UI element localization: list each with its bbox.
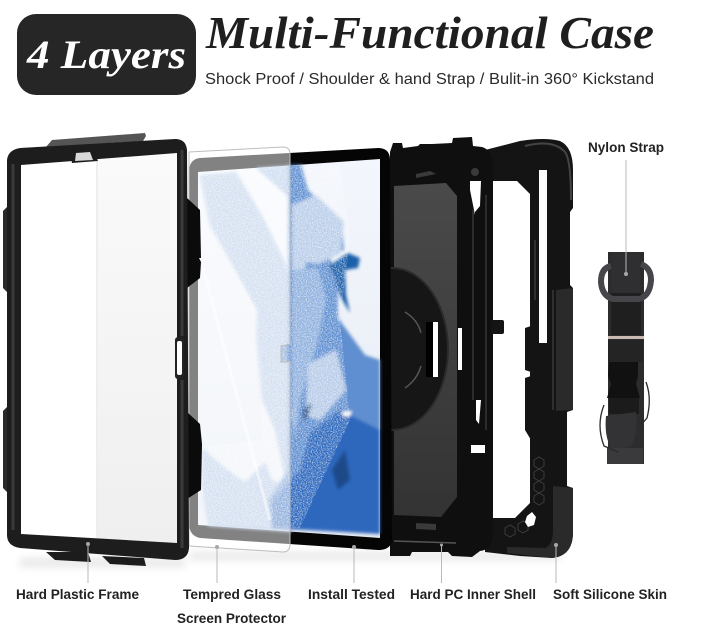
- layer: outer soft silicone skin: [485, 139, 573, 558]
- back panel: [394, 183, 457, 517]
- subtitle: Shock Proof / Shoulder & hand Strap / Bulit-in 360° Kickstand: [205, 71, 654, 88]
- label: screen protector: Screen Protector: [177, 611, 287, 626]
- label: nylon strap: Nylon Strap: [588, 140, 664, 155]
- ground shadow: [20, 552, 560, 567]
- label: soft silicone skin: Soft Silicone Skin: [553, 587, 667, 602]
- nylon strap: [600, 252, 651, 464]
- frame side bumps: [3, 207, 7, 492]
- frame slots: [470, 181, 485, 453]
- label: install tested: Install Tested: [308, 587, 395, 602]
- buckle: [607, 362, 640, 398]
- strap tab: [606, 412, 636, 449]
- badge: 4 Layers: [17, 14, 196, 95]
- label: tempered glass: Tempred Glass: [183, 587, 281, 602]
- layer: hard PC inner shell: [336, 137, 504, 557]
- frame bottom tabs: [46, 552, 146, 566]
- frame notch: [70, 147, 98, 163]
- title: Multi-Functional Case: [205, 7, 654, 58]
- layer: tablet with screen: [189, 148, 392, 550]
- screen artwork: [200, 165, 380, 534]
- leader lines: [86, 160, 628, 583]
- frame side tabs: [187, 198, 202, 499]
- layer: tempered glass screen protector: [189, 147, 290, 552]
- layer: hard plastic frame: [3, 133, 202, 566]
- artwork speckle: [200, 165, 350, 528]
- frame top tab: [46, 133, 146, 147]
- kickstand ring: [336, 268, 462, 430]
- strap ring: [608, 336, 644, 339]
- label: hard PC inner shell: Hard PC Inner Shell: [410, 587, 536, 602]
- frame side button opening: [175, 337, 184, 379]
- badge: 4 Layers: 4 Layers: [26, 32, 186, 77]
- label: hard plastic frame: Hard Plastic Frame: [16, 587, 139, 602]
